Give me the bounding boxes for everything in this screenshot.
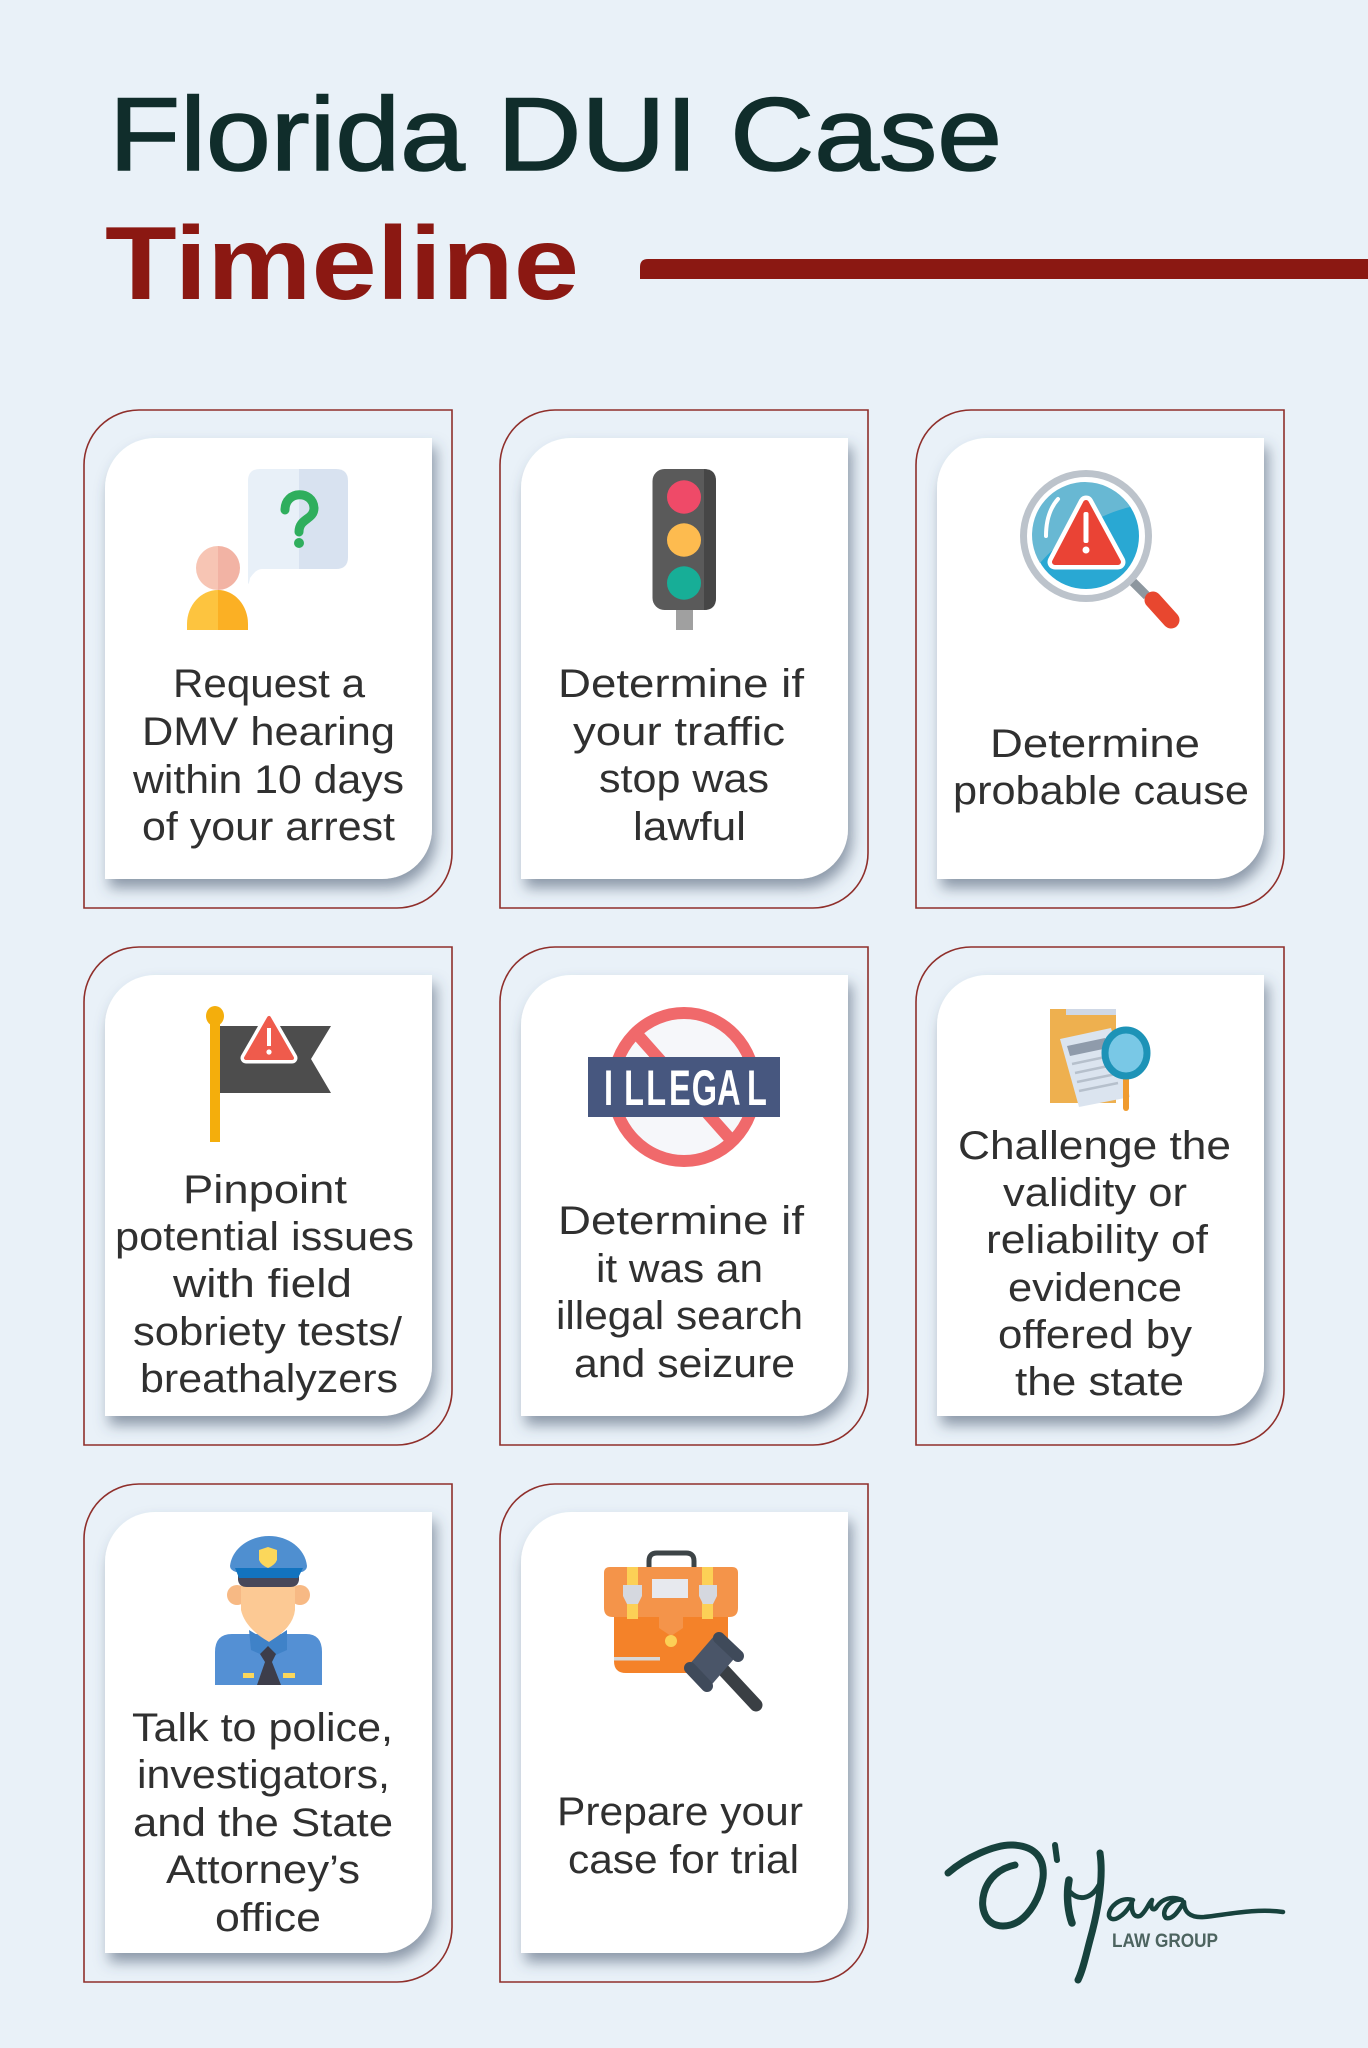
icon: briefcase with gavel [604, 1553, 756, 1705]
icon: magnifier with warning [1020, 470, 1171, 620]
panel: step 7 talk to police [84, 1484, 452, 1982]
card text [557, 1790, 803, 1882]
card text [132, 1706, 393, 1940]
card text: lawful [633, 805, 746, 849]
card outline [916, 410, 1284, 908]
title rule [640, 259, 1368, 279]
panel: step 8 prepare for trial [500, 1484, 868, 1982]
icon: warning flag [206, 1006, 331, 1142]
card text: Talk to police, [132, 1706, 393, 1750]
card text: the state [1015, 1360, 1184, 1404]
card text: and the State [133, 1801, 393, 1845]
panel: step 5 illegal search [500, 947, 868, 1445]
panel: step 4 field sobriety tests [84, 947, 452, 1445]
card text: Attorney’s [166, 1848, 360, 1892]
card text [953, 722, 1249, 813]
card outline [84, 410, 452, 908]
card text: of your arrest [142, 805, 395, 849]
card text: Prepare your [557, 1790, 803, 1834]
card background [521, 975, 848, 1416]
title line 2: Timeline [105, 206, 579, 322]
card text: probable cause [953, 769, 1249, 813]
title line 1: Florida DUI Case [109, 77, 1002, 193]
card outline [84, 1484, 452, 1982]
card text: potential issues [115, 1215, 414, 1259]
card outline [500, 947, 868, 1445]
card text: reliability of [986, 1218, 1209, 1262]
card outline [500, 1484, 868, 1982]
icon: illegal sign: ILLEGAL [604, 1060, 767, 1116]
logo signature [948, 1845, 1283, 1980]
icon: person with question bubble [187, 469, 348, 630]
title [105, 77, 1368, 322]
card text: it was an [596, 1247, 763, 1291]
card text: Determine if [558, 1199, 805, 1243]
icon: illegal sign [588, 1013, 780, 1161]
card text: breathalyzers [140, 1357, 398, 1401]
card text: your traffic [573, 710, 785, 754]
card text: offered by [998, 1313, 1192, 1357]
card text: case for trial [568, 1838, 799, 1882]
card text [558, 662, 805, 849]
card text: illegal search [556, 1294, 803, 1338]
panel: step 6 challenge evidence [916, 947, 1284, 1445]
panel: step 3 probable cause [916, 410, 1284, 908]
card text: Request a [173, 662, 366, 706]
icon: police officer [215, 1536, 322, 1685]
card background [105, 975, 432, 1416]
card text: evidence [1008, 1266, 1182, 1310]
logo: O'Mara Law Group [948, 1845, 1283, 1980]
icon: evidence folder with magnifier [1050, 1009, 1147, 1108]
logo subtitle: LAW GROUP [1112, 1931, 1218, 1952]
card text: Challenge the [958, 1124, 1231, 1168]
card outline [916, 947, 1284, 1445]
icon: traffic light [652, 469, 716, 630]
card text: stop was [599, 757, 769, 801]
card text: with field [172, 1262, 352, 1306]
card outline [500, 410, 868, 908]
card text [115, 1168, 414, 1401]
card text: within 10 days [132, 758, 404, 802]
card text [132, 662, 404, 849]
panel: step 2 traffic stop [500, 410, 868, 908]
card background [105, 1512, 432, 1953]
card text: office [215, 1896, 321, 1940]
card background [937, 975, 1264, 1416]
card text: DMV hearing [142, 710, 395, 754]
card text: validity or [1003, 1171, 1187, 1215]
card background [105, 438, 432, 879]
card text: sobriety tests/ [133, 1310, 403, 1354]
card text: Pinpoint [183, 1168, 347, 1212]
card text: Determine if [558, 662, 805, 706]
card outline [84, 947, 452, 1445]
card text [958, 1124, 1231, 1404]
card text: and seizure [574, 1342, 795, 1386]
card background [937, 438, 1264, 879]
card text: Determine [990, 722, 1200, 766]
card background [521, 1512, 848, 1953]
card background [521, 438, 848, 879]
panel: step 1 DMV hearing [84, 410, 452, 908]
card text [556, 1199, 805, 1386]
card text: investigators, [137, 1753, 390, 1797]
